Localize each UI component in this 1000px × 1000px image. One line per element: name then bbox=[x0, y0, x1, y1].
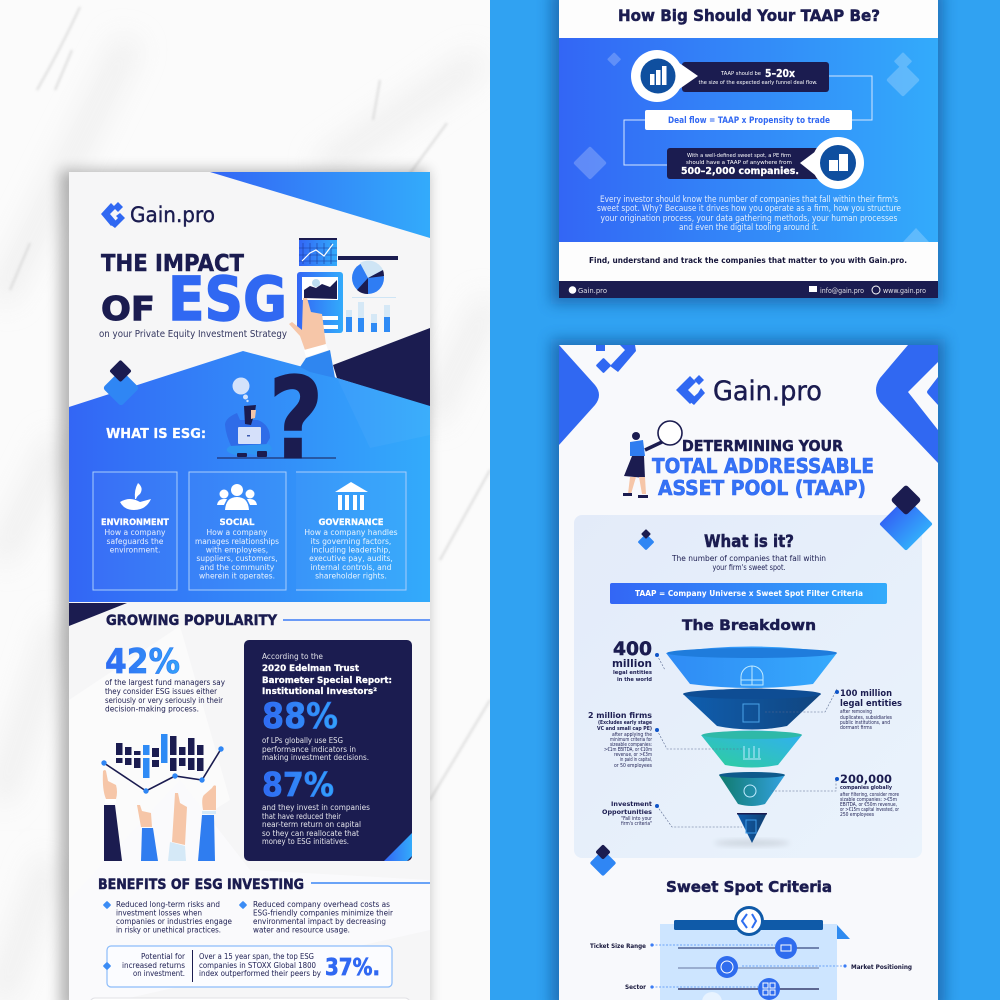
title: The impact of ESG: OF bbox=[101, 289, 155, 328]
label: 100 million: public institutions, and bbox=[840, 720, 890, 726]
panel: governance: shareholder rights. bbox=[315, 572, 387, 580]
benefit 1: in risky or unethical practices. bbox=[116, 926, 221, 934]
label: 2 million firms: in paid in capital, bbox=[620, 757, 652, 763]
label: 100 million: after removing bbox=[840, 709, 872, 715]
illustration: question mark and person: ? bbox=[268, 353, 324, 485]
panel: Edelman stats: of LPs globally use ESG bbox=[262, 736, 343, 745]
callout: 5-20x: the size of the expected early funnel deal flow. bbox=[698, 80, 818, 86]
panel: environment: safeguards the bbox=[107, 537, 164, 546]
panel: social: with employees, bbox=[206, 546, 268, 554]
panel: governance: executive pay, audits, bbox=[309, 554, 393, 563]
callout: increased returns: 37%. bbox=[325, 955, 380, 981]
benefit 2: Reduced company overhead costs as bbox=[253, 900, 390, 909]
thought bubble bbox=[232, 378, 250, 402]
label: 2 million firms: >€1m EBITDA, or €10m bbox=[604, 747, 652, 753]
sweet spot document graphic bbox=[650, 906, 850, 1000]
footer: info@gain.pro bbox=[820, 287, 864, 295]
benefit 2 bbox=[239, 900, 394, 934]
panel: environment: How a company bbox=[104, 528, 166, 537]
decorative diamonds bbox=[103, 360, 139, 406]
dashed leaders bbox=[657, 655, 837, 827]
label: 2 million firms: after applying the bbox=[612, 732, 652, 738]
heading: benefits: BENEFITS OF ESG INVESTING bbox=[98, 877, 304, 893]
stat: 42 percent: seriously or very seriously in their bbox=[105, 696, 224, 705]
label: 400 million bbox=[612, 638, 652, 683]
panel: environment bbox=[93, 472, 177, 590]
panel: social: How a company bbox=[206, 528, 268, 537]
arm 1 bbox=[103, 770, 122, 861]
panel: social bbox=[189, 472, 286, 590]
panel: social: manages relationships bbox=[195, 537, 279, 546]
bottom box outline bbox=[90, 998, 410, 1000]
title: The impact of ESG: ESG bbox=[168, 264, 287, 335]
label: 400 million: in the world bbox=[617, 677, 652, 683]
poster: how big should your TAAP be bbox=[551, 0, 943, 304]
poster: determining your TAAP bbox=[551, 339, 945, 1000]
label: 2 million firms: or 50 employees bbox=[614, 763, 652, 769]
panel: social: suppliers, customers, bbox=[196, 554, 278, 563]
callout: increased returns: index outperformed their peers by bbox=[199, 969, 321, 978]
benefit 1: investment losses when bbox=[116, 908, 202, 918]
icon: buildings bbox=[829, 154, 848, 171]
formula: deal flow: Deal flow = TAAP x Propensity to trade bbox=[668, 116, 830, 126]
benefit 2: water and resource usage. bbox=[253, 926, 350, 934]
connector lines bbox=[624, 76, 872, 165]
formula bar bbox=[610, 583, 887, 604]
stat: 42 percent: decision-making process. bbox=[105, 704, 199, 714]
slider rows bbox=[678, 948, 819, 989]
label: investment opportunities: "Fall into your bbox=[621, 816, 652, 822]
panel: Edelman stats: money to ESG initiatives. bbox=[262, 837, 349, 846]
footer: www.gain.pro bbox=[883, 287, 926, 295]
benefit 1 bbox=[103, 900, 232, 934]
title: The impact of ESG: THE IMPACT bbox=[101, 251, 244, 277]
label: 2 million firms: 2 million firms bbox=[588, 711, 652, 720]
label: investment opportunities: Opportunities bbox=[602, 808, 652, 816]
hero blue band bbox=[69, 351, 430, 602]
formula: deal flow bbox=[645, 110, 852, 130]
icon: hand with plant bbox=[120, 483, 151, 510]
logo: Gain.pro bbox=[676, 375, 822, 407]
poster: ESG impact bbox=[60, 170, 430, 1000]
label: 2 million firms: minimum criteria for bbox=[610, 737, 652, 743]
callout: 5-20x: TAAP should be bbox=[720, 71, 761, 77]
small diamonds bbox=[638, 529, 654, 550]
callout: 500-2000 companies: 500–2,000 companies. bbox=[681, 166, 799, 177]
heading: How Big Should Your TAAP Be? bbox=[618, 6, 880, 25]
panel: Edelman stats: and they invest in companies bbox=[262, 803, 370, 812]
label: ticket size range: Ticket Size Range bbox=[590, 943, 646, 950]
callout: 500-2000 companies: should have a TAAP of anywhere from bbox=[686, 160, 792, 166]
label: market positioning: Market Positioning bbox=[851, 964, 912, 971]
arm 2 bbox=[137, 805, 158, 861]
decorative corner: top right bbox=[210, 172, 430, 238]
callout: 5-20x bbox=[631, 50, 829, 102]
callout: increased returns: companies in STOXX Global 1800 bbox=[199, 961, 316, 970]
benefit 1: Reduced long-term risks and bbox=[116, 900, 220, 909]
label: 2 million firms: (Excludes early stage bbox=[598, 720, 653, 726]
logo: Gain.pro: Gain.pro bbox=[130, 203, 215, 227]
icon: bars bbox=[650, 66, 666, 85]
label: 100 million: legal entities bbox=[840, 699, 902, 709]
paragraph: Every investor should know the number of companies that fall within their firm's bbox=[600, 195, 898, 205]
label: 400 million: legal entities bbox=[613, 670, 652, 676]
illustration: woman with magnifier bbox=[623, 421, 682, 498]
decorative diamonds: bottom left bbox=[590, 844, 616, 876]
label: 200,000: 250 employees bbox=[840, 812, 874, 818]
chart: bars and line with raised hands bbox=[101, 734, 224, 861]
paragraph: sweet spot. Why? Because it drives how you operate as a firm, how you structure bbox=[597, 204, 901, 214]
panel: governance bbox=[296, 472, 406, 590]
label: 100 million bbox=[840, 689, 902, 731]
label: 100 million: 100 million bbox=[840, 689, 892, 699]
panel: Edelman stats: performance indicators in bbox=[262, 745, 356, 754]
benefit 2: ESG-friendly companies minimize their bbox=[253, 908, 394, 918]
label: investment opportunities bbox=[602, 800, 652, 827]
label: 200,000: sizable companies: >€5m bbox=[840, 797, 897, 803]
label: investment opportunities: Investment bbox=[611, 800, 652, 808]
title: The impact of ESG: on your Private Equity Investment Strategy bbox=[99, 329, 287, 340]
panel: Edelman stats: so they can reallocate that bbox=[262, 829, 359, 838]
footer: Gain.pro bbox=[578, 287, 607, 295]
label: sector: Sector bbox=[625, 984, 647, 991]
label: 200,000: EBITDA, or €50m revenue, bbox=[840, 802, 897, 808]
label: investment opportunities: firm's criteria" bbox=[621, 821, 652, 827]
panel: Edelman stats: making investment decisions. bbox=[262, 753, 369, 762]
icons in funnel bbox=[741, 666, 763, 833]
title: TOTAL ADDRESSABLE bbox=[652, 454, 874, 478]
label: 2 million firms: sizeable companies: bbox=[610, 742, 652, 748]
label: 200,000: 200,000 bbox=[840, 772, 892, 786]
panel: Edelman stats: 2020 Edelman Trust bbox=[262, 664, 359, 674]
panel: governance: its governing factors, bbox=[311, 537, 391, 546]
title: The impact of ESG bbox=[99, 251, 287, 340]
heading: breakdown: The Breakdown bbox=[682, 618, 816, 634]
title bbox=[652, 437, 874, 500]
label: 400 million: million bbox=[612, 657, 652, 670]
label: 200,000: or >€15m capital invested, or bbox=[840, 807, 899, 813]
label: 2 million firms: VC and small cap PE) bbox=[597, 726, 652, 732]
panel: what is it and breakdown: your firm's sweet spot. bbox=[712, 563, 786, 572]
label: 2 million firms: revenue, or >€3m bbox=[614, 752, 652, 758]
formula bar: TAAP = Company Universe x Sweet Spot Filter Criteria bbox=[635, 589, 863, 598]
panel: Edelman stats: According to the bbox=[262, 652, 323, 661]
callout: 500-2000 companies: With a well-defined sweet spot, a PE firm bbox=[687, 153, 791, 159]
panel: governance: including leadership, bbox=[311, 546, 391, 554]
person bbox=[225, 405, 272, 457]
icon: building columns bbox=[335, 482, 368, 510]
panel: social: and the community bbox=[200, 563, 275, 572]
label: 200,000: companies globally bbox=[840, 785, 893, 791]
panel: environment: ENVIRONMENT bbox=[101, 518, 169, 528]
stat: 42 percent: 42% bbox=[105, 642, 180, 682]
panel: Edelman stats: that have reduced their bbox=[262, 812, 342, 821]
footer bbox=[559, 281, 938, 298]
logo: Gain.pro bbox=[101, 202, 215, 228]
blue background bbox=[490, 0, 1000, 1000]
panel: Edelman stats: 87% bbox=[262, 765, 334, 804]
panel: governance: GOVERNANCE bbox=[318, 518, 384, 528]
heading: what is it: What is it? bbox=[704, 532, 794, 551]
panel: social: SOCIAL bbox=[220, 518, 255, 528]
label: 200,000 bbox=[840, 772, 899, 818]
benefit 2: environmental impact by decreasing bbox=[253, 917, 386, 926]
panel: governance: How a company handles bbox=[304, 528, 398, 537]
decorative diamonds: right bbox=[879, 484, 933, 551]
blue band bbox=[559, 38, 938, 242]
callout: increased returns bbox=[103, 946, 392, 987]
panel: Edelman stats bbox=[244, 640, 412, 861]
callout: increased returns: Potential for bbox=[141, 952, 186, 961]
panel: social: wherein it operates. bbox=[199, 572, 275, 580]
label: 400 million: 400 bbox=[613, 638, 652, 660]
arm 4 bbox=[198, 785, 216, 861]
decorative navy corner bbox=[69, 603, 127, 626]
icon: people bbox=[217, 484, 257, 510]
label: 100 million: duplicates, subsidiaries bbox=[840, 715, 892, 721]
callout: increased returns: on investment. bbox=[133, 969, 185, 978]
decorative shapes: top corners bbox=[559, 345, 938, 463]
paragraph: your origination process, your data gathering methods, your human processes bbox=[600, 214, 898, 224]
funnel bbox=[666, 646, 837, 846]
heading: sweet spot criteria: Sweet Spot Criteria bbox=[666, 878, 832, 896]
marble background bbox=[0, 0, 490, 1000]
label: 100 million: dormant firms bbox=[840, 725, 872, 731]
paragraph bbox=[597, 195, 901, 233]
callout: 5-20x: 5–20x bbox=[765, 68, 795, 80]
logo: Gain.pro: Gain.pro bbox=[713, 376, 822, 407]
callout: increased returns: Over a 15 year span, the top ESG bbox=[199, 952, 314, 961]
title: ASSET POOL (TAAP) bbox=[658, 476, 866, 500]
stat: 42 percent: they consider ESG issues either bbox=[105, 687, 218, 696]
panel: Edelman stats: Institutional Investors² bbox=[262, 687, 377, 697]
panel: environment: environment. bbox=[110, 546, 160, 554]
panel: Edelman stats: near-term return on capital bbox=[262, 820, 361, 829]
panel: what is it and breakdown: The number of companies that fall within bbox=[671, 554, 826, 563]
heading: growing popularity: GROWING POPULARITY bbox=[106, 613, 278, 629]
tagline: Find, understand and track the companies that matter to you with Gain.pro. bbox=[589, 256, 907, 265]
stat: 42 percent bbox=[105, 642, 225, 714]
panel: what is it and breakdown bbox=[574, 515, 922, 858]
illustration: dashboard with pointing hand bbox=[289, 238, 398, 378]
panel: Edelman stats: 88% bbox=[262, 697, 338, 737]
callout: 500-2000 companies bbox=[667, 137, 864, 189]
label: 200,000: after filtering, consider more bbox=[840, 792, 899, 798]
stat: 42 percent: of the largest fund managers say bbox=[105, 678, 225, 687]
title: DETERMINING YOUR bbox=[682, 437, 843, 455]
paragraph: and even the digital tooling around it. bbox=[679, 223, 819, 233]
heading: what is ESG: WHAT IS ESG: bbox=[106, 427, 206, 442]
benefit 1: companies or industries engage bbox=[116, 917, 232, 926]
decorative navy triangle bbox=[333, 328, 430, 407]
callout: increased returns: increased returns bbox=[122, 961, 185, 970]
panel: governance: internal controls, and bbox=[311, 563, 392, 572]
label: 2 million firms bbox=[588, 711, 653, 769]
arm 3 bbox=[168, 793, 187, 861]
panel: Edelman stats: Barometer Special Report: bbox=[262, 676, 392, 686]
illustration: question mark and person bbox=[217, 353, 336, 485]
